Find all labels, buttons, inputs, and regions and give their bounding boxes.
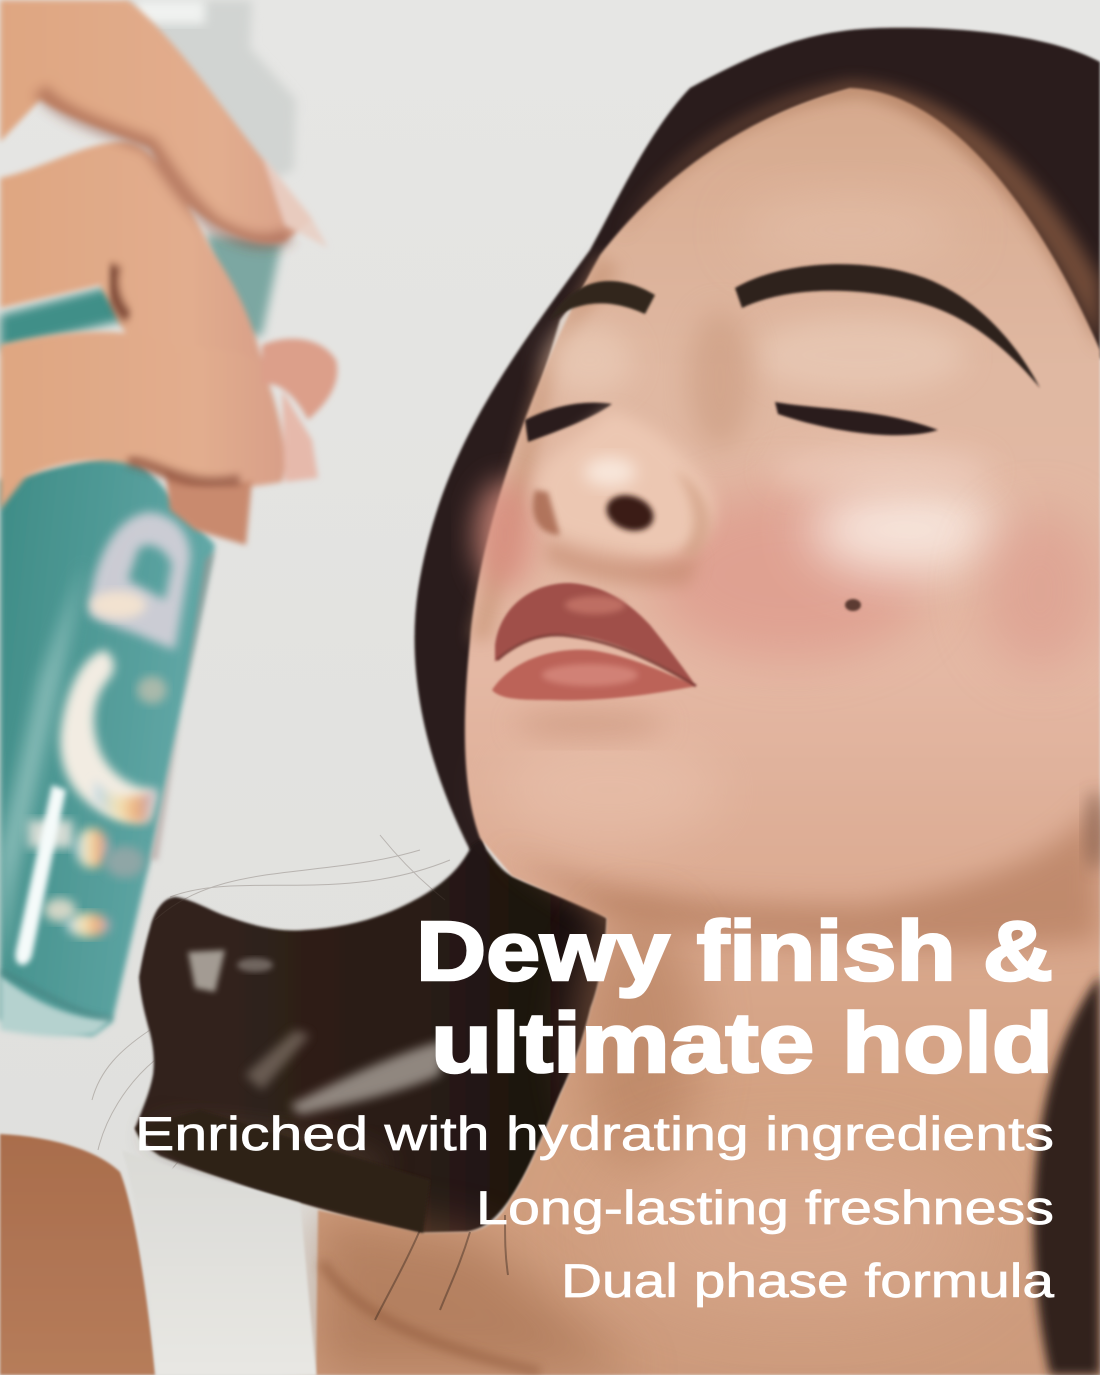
bar one bbox=[28, 820, 73, 848]
bottle bbox=[0, 0, 296, 1037]
crescent rainbow bbox=[95, 780, 155, 823]
neck lower glow bbox=[610, 1150, 990, 1310]
crown and face strand bbox=[415, 28, 1100, 850]
curl second highlight bbox=[237, 958, 273, 972]
under lip shadow bbox=[515, 711, 665, 739]
lower lip bbox=[492, 650, 696, 700]
curl lower edge over strap bbox=[135, 1110, 430, 1233]
nostril bbox=[602, 489, 658, 537]
rainbow spot one bbox=[75, 828, 109, 868]
bottle nozzle bbox=[125, 0, 296, 190]
letter ring bbox=[90, 512, 190, 650]
hair wisps on neck bbox=[375, 1215, 508, 1320]
collarbone crease bbox=[322, 1262, 540, 1372]
bottle upper segment bbox=[205, 235, 282, 340]
nose form bbox=[537, 410, 713, 558]
headline line 1: Dewy finish & bbox=[416, 904, 1053, 998]
bottle soft light band bbox=[0, 560, 85, 970]
curl upper highlight bbox=[188, 950, 225, 992]
top finger bbox=[0, 0, 312, 244]
eyelid left bbox=[548, 325, 632, 395]
cheek blush bbox=[650, 490, 930, 660]
lower lip shine bbox=[542, 664, 638, 686]
nose wing shadow bbox=[533, 490, 560, 535]
hair flyaways bbox=[92, 835, 450, 1230]
lips bbox=[492, 583, 696, 700]
bottle holographic lettering bbox=[15, 512, 190, 965]
knuckle crease bbox=[112, 265, 128, 318]
nose side shadow bbox=[675, 470, 710, 558]
lowest finger stub bbox=[165, 470, 252, 545]
rainbow bar bbox=[66, 913, 110, 937]
base shadow bbox=[0, 972, 112, 1018]
bar two bbox=[44, 898, 76, 922]
nose under shadow bbox=[545, 540, 700, 586]
left eyebrow bbox=[550, 281, 655, 320]
right eyebrow bbox=[735, 264, 1040, 388]
finger nail bbox=[282, 390, 318, 482]
neck left shadow bbox=[580, 910, 700, 1170]
curl long sheen bbox=[290, 1040, 445, 1115]
small letter blob bbox=[137, 676, 167, 704]
middle finger bbox=[0, 142, 270, 430]
right eye lashes bbox=[775, 402, 938, 435]
benefit 1: Enriched with hydrating ingredients bbox=[135, 1107, 1054, 1160]
top nail bbox=[262, 155, 328, 248]
outer cheek blush bbox=[980, 510, 1100, 670]
hair shadow on right bbox=[1085, 790, 1100, 870]
eyelid right bbox=[755, 317, 965, 393]
lower hair curl bbox=[135, 840, 607, 1233]
face shading bbox=[316, 82, 1100, 1375]
chest shade bbox=[316, 1210, 640, 1375]
chin light bbox=[500, 735, 720, 845]
bottle gap teal bbox=[0, 285, 125, 350]
right lower hair bbox=[1034, 975, 1100, 1375]
eye socket shadow bbox=[688, 310, 752, 450]
nose highlight bbox=[584, 457, 636, 487]
cheek highlight bbox=[810, 485, 1000, 575]
top finger crease bbox=[40, 90, 290, 242]
lower finger bbox=[0, 332, 285, 510]
palm lower crease bbox=[128, 460, 240, 483]
upper lip bbox=[495, 583, 696, 686]
face and neck skin bbox=[316, 88, 1100, 1375]
rainbow spot two bbox=[105, 846, 145, 878]
benefit 2: Long-lasting freshness bbox=[476, 1181, 1054, 1234]
bottle body bbox=[0, 450, 215, 1036]
lip parting bbox=[497, 635, 696, 686]
shoulder bbox=[0, 1134, 155, 1375]
hand holding bottle bbox=[0, 0, 337, 545]
nozzle highlight bbox=[135, 0, 205, 24]
mole bbox=[845, 599, 861, 611]
jaw shadow bbox=[482, 800, 1100, 949]
upper lip shine bbox=[565, 596, 625, 614]
bottle base bbox=[0, 975, 112, 1037]
crescent bbox=[60, 650, 158, 821]
left cheek blush bbox=[475, 480, 535, 590]
forehead hairline shadow bbox=[620, 82, 1100, 350]
benefit 3: Dual phase formula bbox=[561, 1254, 1055, 1307]
left eye lashes bbox=[525, 403, 612, 442]
headline bbox=[416, 904, 1053, 1090]
under eye glow bbox=[770, 445, 990, 495]
headline line 2: ultimate hold bbox=[431, 996, 1053, 1090]
curl mid tone bbox=[148, 1112, 392, 1188]
white glint bbox=[15, 785, 66, 965]
nose bbox=[533, 410, 713, 586]
curl small sheen bbox=[245, 1030, 310, 1090]
benefits list bbox=[135, 1107, 1055, 1307]
ring warm glow bbox=[90, 591, 146, 619]
left temple shadow bbox=[470, 255, 620, 640]
brow bone light bbox=[740, 195, 960, 265]
white top strap bbox=[122, 1150, 316, 1375]
bottle right edge tint bbox=[150, 550, 215, 860]
fingertip bbox=[262, 339, 337, 420]
